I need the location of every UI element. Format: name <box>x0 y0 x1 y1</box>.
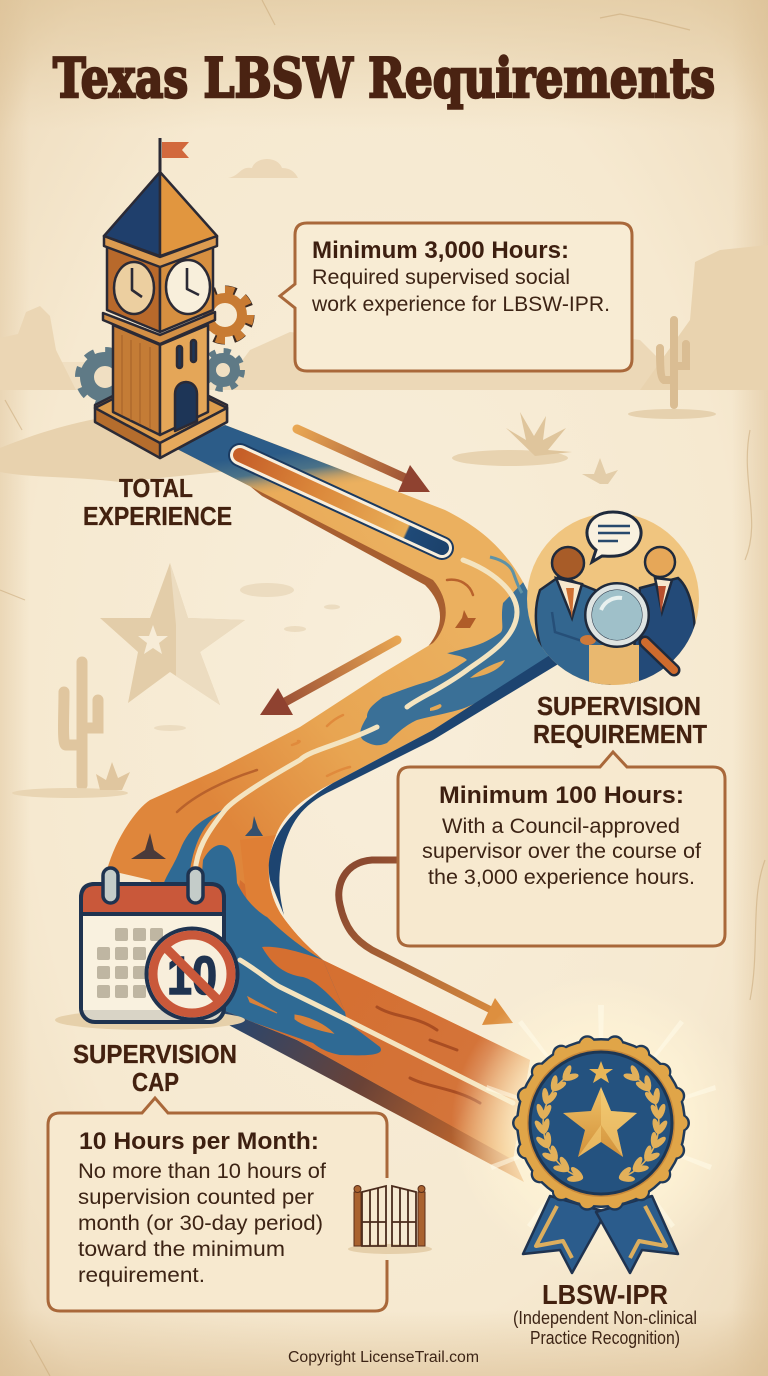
sand patches <box>154 583 340 731</box>
navy road side <box>269 655 560 915</box>
clock section <box>107 247 160 332</box>
callout: minimum 3,000 hours: Required supervised social <box>312 266 570 289</box>
no sign <box>146 928 238 1020</box>
callout: 10 hours per month: No more than 10 hours of <box>78 1160 326 1183</box>
calendar grid <box>97 928 163 998</box>
icon: clock tower <box>78 138 250 458</box>
callout: 10 hours per month: requirement. <box>78 1264 205 1287</box>
icon: calendar with no-10 sign <box>55 868 245 1030</box>
label: supervision cap: CAP <box>132 1069 179 1097</box>
arrow: top <box>297 429 430 492</box>
icon: gate <box>348 1186 432 1254</box>
label: LBSW-IPR: Practice Recognition) <box>530 1328 680 1348</box>
dune under tower <box>0 412 240 482</box>
door <box>175 382 197 431</box>
label: supervision cap: SUPERVISION <box>73 1041 237 1069</box>
left person <box>536 547 610 690</box>
label: total experience: EXPERIENCE <box>83 503 232 531</box>
label: supervision cap <box>73 1041 237 1097</box>
label: LBSW-IPR: (Independent Non-clinical <box>513 1308 697 1328</box>
callout: minimum 100 hours: With a Council-approved <box>442 815 680 838</box>
callout: minimum 3,000 hours: work experience for LBSW-IPR. <box>311 293 610 316</box>
callout: 10 hours per month: month (or 30-day period) <box>78 1212 323 1235</box>
lower body <box>113 325 160 435</box>
arrow: middle <box>260 640 397 715</box>
large star <box>563 1087 637 1157</box>
callout: minimum 100 hours: Minimum 100 Hours: <box>439 782 684 809</box>
callout: 10 hours per month <box>48 1098 387 1311</box>
small star <box>589 1061 613 1083</box>
copyright: Copyright LicenseTrail.com <box>288 1349 479 1366</box>
laurels <box>533 1064 585 1182</box>
callout: minimum 100 hours: supervisor over the course of <box>422 840 701 863</box>
no sign: 10 <box>167 946 217 1006</box>
icon: supervision <box>527 512 699 690</box>
roof <box>104 172 160 256</box>
label: LBSW-IPR: LBSW-IPR <box>542 1279 668 1310</box>
left blue stream <box>160 808 347 1022</box>
winding road <box>107 415 560 1182</box>
cream lane line <box>195 560 517 1103</box>
blue stream at bend <box>360 575 560 745</box>
agave plants <box>452 450 568 466</box>
arrow: curved to badge <box>339 860 513 1025</box>
lower stretch orange <box>223 880 530 1160</box>
right person <box>630 547 695 690</box>
cactus right <box>660 320 686 405</box>
blue below lane <box>223 958 381 1055</box>
brown side on the first bend <box>240 478 451 650</box>
scalloped rim <box>516 1038 686 1208</box>
faded star <box>100 563 245 705</box>
callout: 10 hours per month: supervision counted per <box>78 1186 314 1209</box>
gears <box>78 290 250 404</box>
flag <box>158 138 162 172</box>
callout: minimum 3,000 hours <box>280 223 632 371</box>
label: supervision requirement: REQUIREMENT <box>533 721 707 749</box>
road tufts <box>455 610 476 628</box>
label: supervision requirement: SUPERVISION <box>537 693 701 721</box>
cornice bands <box>103 312 215 344</box>
label: supervision requirement <box>533 693 707 749</box>
lower road side <box>223 1008 524 1182</box>
road surface details <box>160 415 560 1160</box>
magnifying glass <box>588 586 674 670</box>
callout: minimum 100 hours <box>398 752 725 946</box>
speech bubble <box>587 512 641 562</box>
plinth <box>95 372 227 458</box>
people <box>536 547 695 690</box>
callout: minimum 100 hours: the 3,000 experience hours. <box>428 866 695 889</box>
windows <box>177 346 182 368</box>
cactus left <box>64 662 98 785</box>
label: total experience: TOTAL <box>119 475 193 503</box>
callout: minimum 3,000 hours: Minimum 3,000 Hours: <box>312 237 569 264</box>
calendar rings <box>103 868 203 903</box>
icon: LBSW-IPR badge <box>451 975 751 1275</box>
label: total experience <box>83 475 232 531</box>
callout: 10 hours per month: toward the minimum <box>78 1238 285 1261</box>
road surface <box>107 425 550 1160</box>
callout: 10 hours per month: 10 Hours per Month: <box>79 1128 319 1155</box>
road marks <box>177 580 473 812</box>
first stretch blue <box>178 425 363 492</box>
ribbons <box>523 1196 678 1273</box>
clock faces <box>114 262 154 314</box>
progress bar <box>240 455 442 548</box>
glow <box>451 975 751 1275</box>
label: LBSW-IPR <box>513 1279 697 1348</box>
desert backdrop <box>0 159 768 798</box>
